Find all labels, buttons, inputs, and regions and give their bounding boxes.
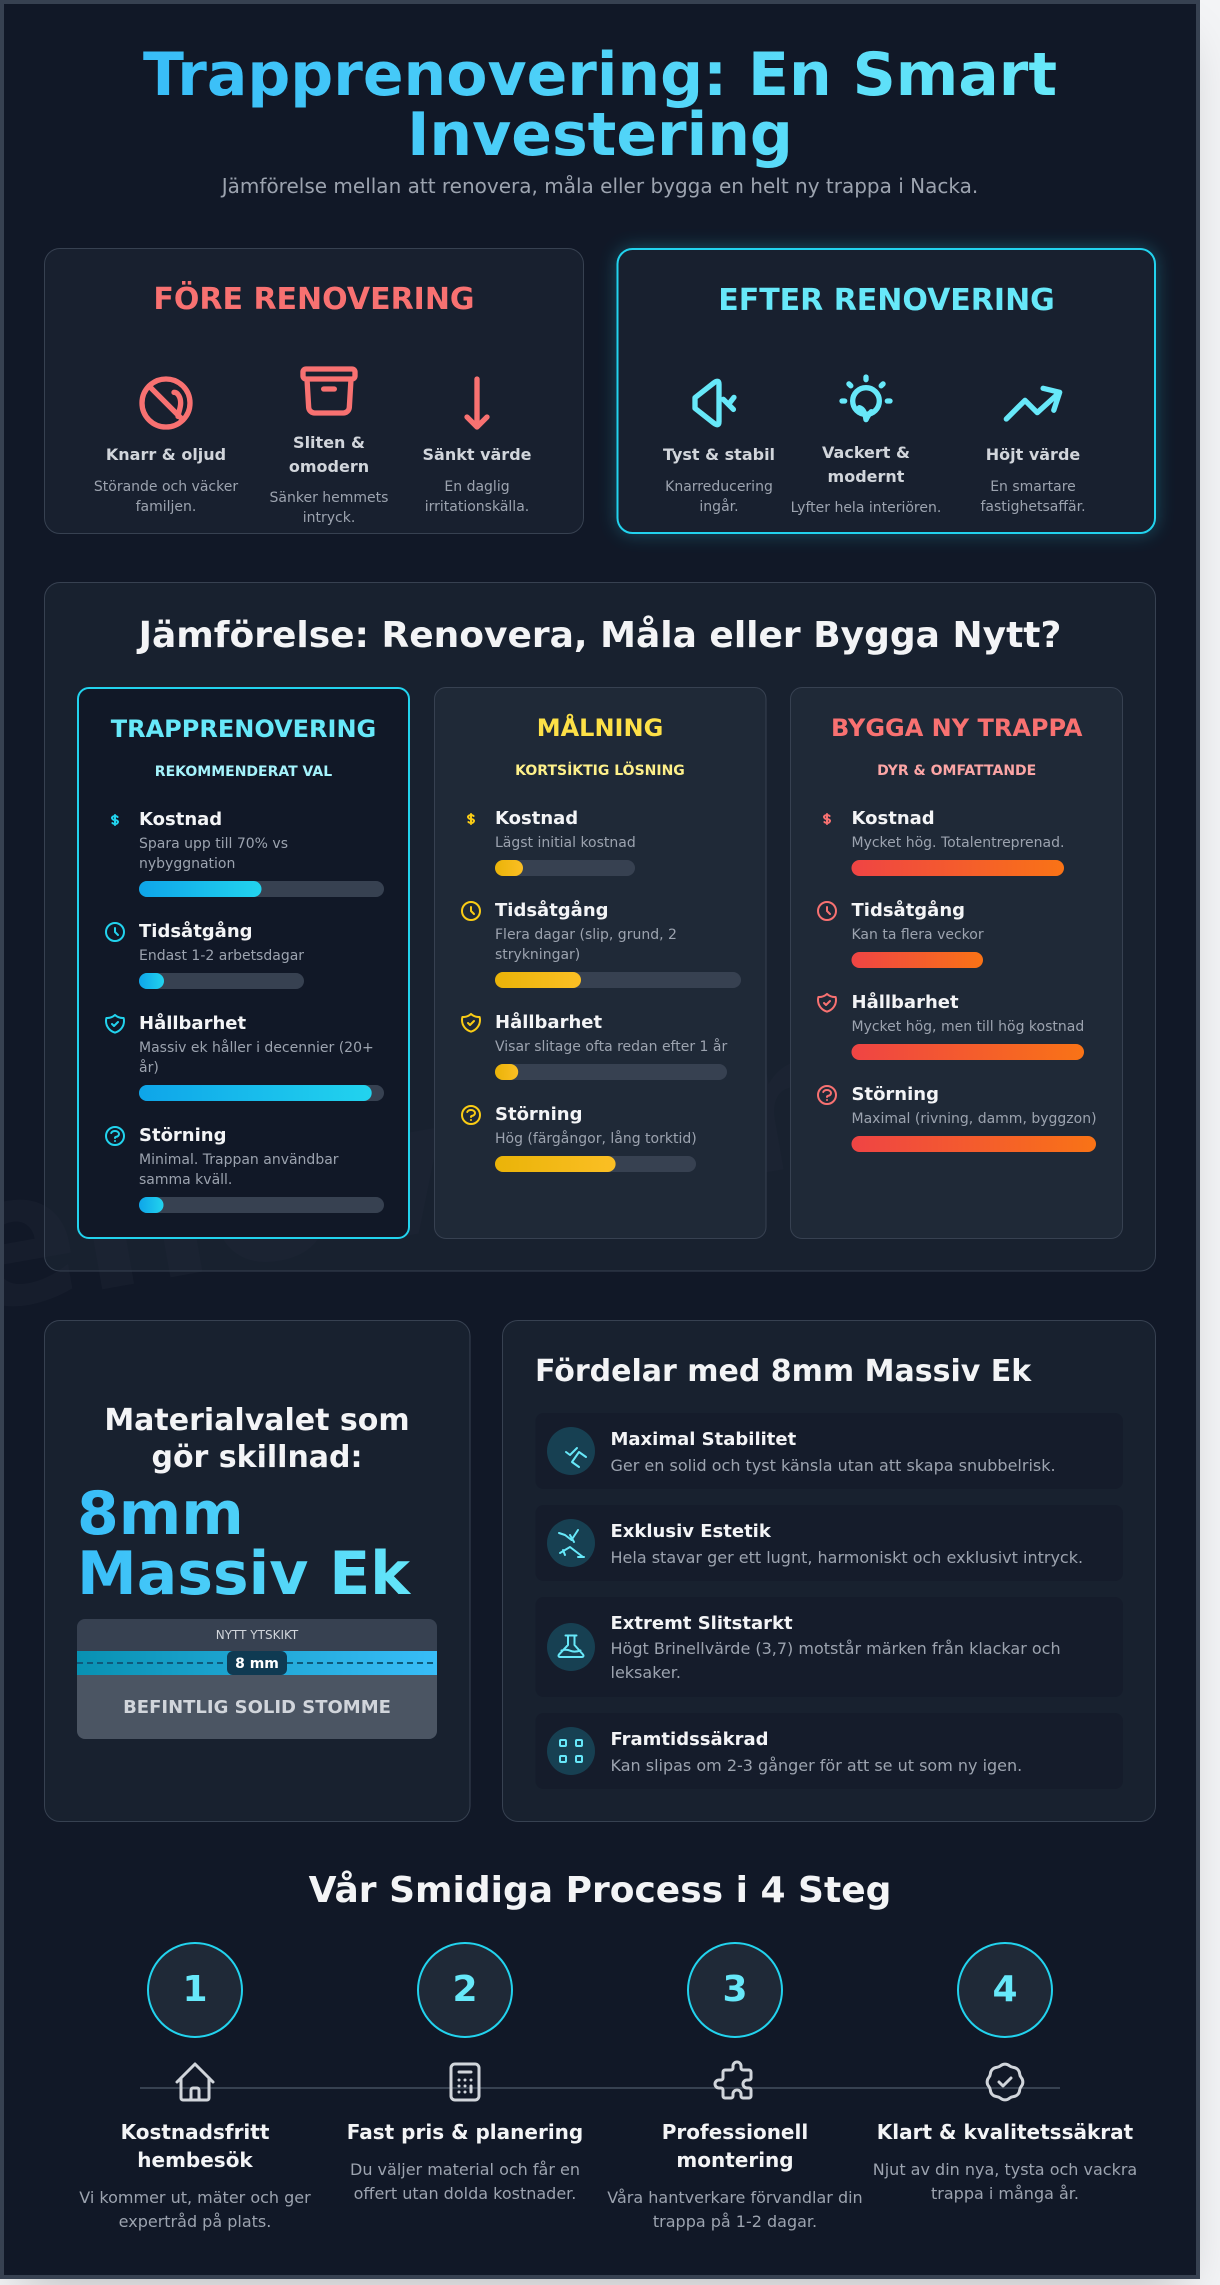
item: sliten och omodern: omodern (289, 457, 369, 476)
row: hållbarhet: Mycket hög, men till hög kostnad (852, 1019, 1084, 1035)
row: hållbarhet: Hållbarhet (852, 991, 959, 1013)
step 1: Vi kommer ut, mäter och ger (79, 2188, 311, 2207)
row: kostnad: Kostnad (139, 809, 222, 830)
item: sänkt värde: En daglig (444, 479, 510, 495)
benefit: maximal stabilitet: Maximal Stabilitet (610, 1429, 797, 1450)
diagram: material layers: 8 mm (235, 1656, 279, 1672)
benefit: framtidssäkrad (536, 1713, 1123, 1789)
heading: materialvalet: gör skillnad: (151, 1440, 363, 1475)
card: bygga ny trappa: BYGGA NY TRAPPA (831, 714, 1083, 742)
row: kostnad: Kostnad (495, 808, 578, 829)
panel: fördelar (502, 1320, 1156, 1822)
step 1: hembesök (137, 2148, 253, 2172)
card: målning: KORTSİKTIG LÖSNING (515, 761, 685, 779)
row: tidsåtgång: strykningar) (495, 947, 580, 963)
card: målning (434, 688, 766, 1238)
row: störning (818, 1084, 1097, 1152)
panel: jämförelse (44, 582, 1156, 1271)
title: Trapprenovering: En Smart (143, 40, 1057, 110)
row: hållbarhet: Hållbarhet (495, 1011, 602, 1033)
item: vackert och modernt (791, 377, 941, 516)
item: vackert och modernt: Vackert & (822, 443, 910, 462)
heading: jämförelse: Jämförelse: Renovera, Måla eller Bygga Nytt? (136, 615, 1061, 656)
item: höjt värde: Höjt värde (986, 445, 1080, 464)
title (143, 40, 1057, 170)
step 1: 1 (182, 1969, 208, 2010)
item: vackert och modernt: Lyfter hela interiören. (791, 500, 941, 516)
step 3: Professionell (662, 2120, 808, 2144)
row: störning (106, 1125, 384, 1213)
card: trapprenovering: TRAPPRENOVERING (111, 715, 376, 743)
item: sliten och omodern (270, 369, 388, 526)
benefit: framtidssäkrad: Kan slipas om 2-3 gånger för att se ut som ny igen. (610, 1756, 1022, 1775)
icon: no sound (139, 376, 193, 430)
icon: puzzle piece (714, 2060, 752, 2100)
row: kostnad: nybyggnation (139, 856, 235, 872)
item: tyst och stabil: Tyst & stabil (663, 445, 775, 464)
heading: process: Vår Smidiga Process i 4 Steg (309, 1870, 891, 1911)
benefit: maximal stabilitet (536, 1413, 1123, 1489)
step 2: offert utan dolda kostnader. (354, 2184, 576, 2203)
row: störning (462, 1104, 697, 1172)
row: kostnad: Spara upp till 70% vs (139, 836, 288, 852)
step 3: montering (676, 2148, 794, 2172)
row: störning: Maximal (rivning, damm, byggzon) (852, 1111, 1097, 1127)
item: sänkt värde (422, 379, 532, 515)
item: vackert och modernt: modernt (828, 467, 905, 486)
benefit: extremt slitstarkt: leksaker. (610, 1663, 681, 1682)
benefit: extremt slitstarkt (536, 1597, 1123, 1697)
row: störning: Störning (495, 1104, 582, 1125)
benefit: framtidssäkrad: Framtidssäkrad (610, 1729, 769, 1750)
step 4: trappa i många år. (931, 2184, 1079, 2203)
benefit: exklusiv estetik (536, 1505, 1123, 1581)
row: kostnad (824, 808, 1064, 876)
step 3: trappa på 1-2 dagar. (653, 2212, 817, 2231)
diagram: material layers: NYTT YTSKIKT (216, 1628, 299, 1642)
icon: calculator (450, 2062, 480, 2102)
diagram: material layers (77, 1619, 437, 1739)
step 3: 3 (722, 1969, 748, 2010)
icon: trending up (1004, 386, 1062, 422)
card: bygga ny trappa (790, 688, 1122, 1238)
item: tyst och stabil: ingår. (699, 498, 739, 515)
heading: fördelar: Fördelar med 8mm Massiv Ek (535, 1354, 1032, 1389)
step 3: Våra hantverkare förvandlar din (607, 2188, 863, 2207)
panel: före renovering (44, 248, 584, 534)
item: sliten och omodern: Sliten & (293, 433, 365, 452)
icon: light bulb (839, 374, 893, 422)
step 1 (79, 1943, 311, 2231)
benefit: maximal stabilitet: Ger en solid och tyst känsla utan att skapa snubbelrisk. (610, 1456, 1056, 1475)
highlight: 8mm massiv ek: Massiv Ek (77, 1539, 412, 1609)
row: hållbarhet: Visar slitage ofta redan efter 1 år (495, 1038, 727, 1055)
step 4 (873, 1943, 1137, 2203)
row: tidsåtgång: Endast 1-2 arbetsdagar (139, 948, 304, 964)
card: målning: MÅLNING (537, 713, 663, 742)
item: knarr och oljud (94, 379, 238, 515)
subtitle: Jämförelse mellan att renovera, måla eller bygga en helt ny trappa i Nacka. (220, 174, 978, 198)
benefit: extremt slitstarkt: Högt Brinellvärde (3,7) motstår märken från klackar och (610, 1639, 1061, 1658)
item: höjt värde: En smartare (990, 479, 1076, 495)
card: bygga ny trappa: DYR & OMFATTANDE (877, 763, 1036, 779)
icon: archive box (300, 366, 358, 416)
row: störning: Störning (139, 1125, 226, 1146)
highlight: 8mm massiv ek: 8mm (77, 1479, 244, 1549)
title: Investering (407, 100, 793, 170)
item: knarr och oljud: Knarr & oljud (106, 445, 226, 464)
item: knarr och oljud: Störande och väcker (94, 479, 238, 495)
row: hållbarhet: år) (139, 1059, 159, 1076)
step 4: Klart & kvalitetssäkrat (877, 2120, 1134, 2144)
row: hållbarhet (106, 1012, 384, 1101)
step 1: Kostnadsfritt (121, 2120, 270, 2144)
card: trapprenovering (78, 688, 409, 1238)
row: tidsåtgång: Tidsåtgång (139, 920, 253, 942)
panel: efter renovering (617, 248, 1156, 534)
diagram: material layers: BEFINTLIG SOLID STOMME (123, 1697, 391, 1718)
heading: materialvalet (104, 1403, 410, 1475)
step 2: Fast pris & planering (347, 2120, 583, 2144)
card: trapprenovering: REKOMMENDERAT VAL (155, 764, 332, 780)
item: tyst och stabil (663, 381, 775, 515)
benefit: exklusiv estetik: Exklusiv Estetik (610, 1521, 772, 1542)
step 4: Njut av din nya, tysta och vackra (873, 2160, 1137, 2179)
row: tidsåtgång: Tidsåtgång (495, 899, 609, 921)
heading: före: FÖRE RENOVERING (153, 280, 475, 317)
icon: house (175, 2062, 215, 2102)
item: knarr och oljud: familjen. (136, 499, 196, 515)
row: hållbarhet: Hållbarhet (139, 1012, 246, 1034)
item: sliten och omodern: intryck. (303, 510, 355, 526)
row: hållbarhet: Massiv ek håller i decennier (20+ (139, 1039, 374, 1056)
item: tyst och stabil: Knarreducering (665, 479, 773, 495)
row: kostnad (112, 809, 384, 897)
row: störning: Hög (färgångor, lång torktid) (495, 1130, 697, 1147)
row: kostnad: Kostnad (852, 808, 935, 829)
panel: materialval (44, 1320, 470, 1822)
row: tidsåtgång: Flera dagar (slip, grund, 2 (495, 927, 677, 943)
row: tidsåtgång: Tidsåtgång (852, 899, 965, 921)
icon: badge check (986, 2062, 1024, 2102)
highlight: 8mm massiv ek (77, 1479, 412, 1609)
heading: efter: EFTER RENOVERING (718, 283, 1055, 318)
row: tidsåtgång (106, 920, 304, 989)
row: störning: Minimal. Trappan användbar (139, 1152, 339, 1168)
icon: muted speaker (692, 378, 737, 428)
row: tidsåtgång: Kan ta flera veckor (852, 927, 984, 943)
item: sänkt värde: irritationskälla. (425, 499, 529, 515)
step 2: Du väljer material och får en (350, 2160, 580, 2179)
step 1: expertråd på plats. (119, 2212, 271, 2231)
step 4: 4 (992, 1969, 1018, 2010)
row: hållbarhet (818, 991, 1084, 1060)
benefit: exklusiv estetik: Hela stavar ger ett lugnt, harmoniskt och exklusivt intryck. (610, 1548, 1083, 1567)
row: tidsåtgång (818, 899, 984, 968)
row: störning: Störning (852, 1084, 939, 1105)
item: höjt värde: fastighetsaffär. (980, 499, 1086, 515)
step 2 (347, 1943, 583, 2203)
row: kostnad (468, 808, 636, 876)
row: störning: samma kväll. (139, 1172, 232, 1188)
benefit: extremt slitstarkt: Extremt Slitstarkt (610, 1613, 793, 1634)
item: sänkt värde: Sänkt värde (422, 445, 532, 464)
step 2: 2 (452, 1969, 478, 2010)
row: kostnad: Lägst initial kostnad (495, 835, 636, 851)
row: hållbarhet (462, 1011, 727, 1080)
row: tidsåtgång (462, 899, 741, 988)
row: kostnad: Mycket hög. Totalentreprenad. (852, 835, 1064, 851)
icon: arrow down (464, 376, 490, 430)
item: höjt värde (980, 388, 1086, 515)
step 3 (607, 1943, 863, 2231)
item: sliten och omodern: Sänker hemmets (270, 490, 388, 506)
heading: materialvalet: Materialvalet som (104, 1403, 410, 1438)
